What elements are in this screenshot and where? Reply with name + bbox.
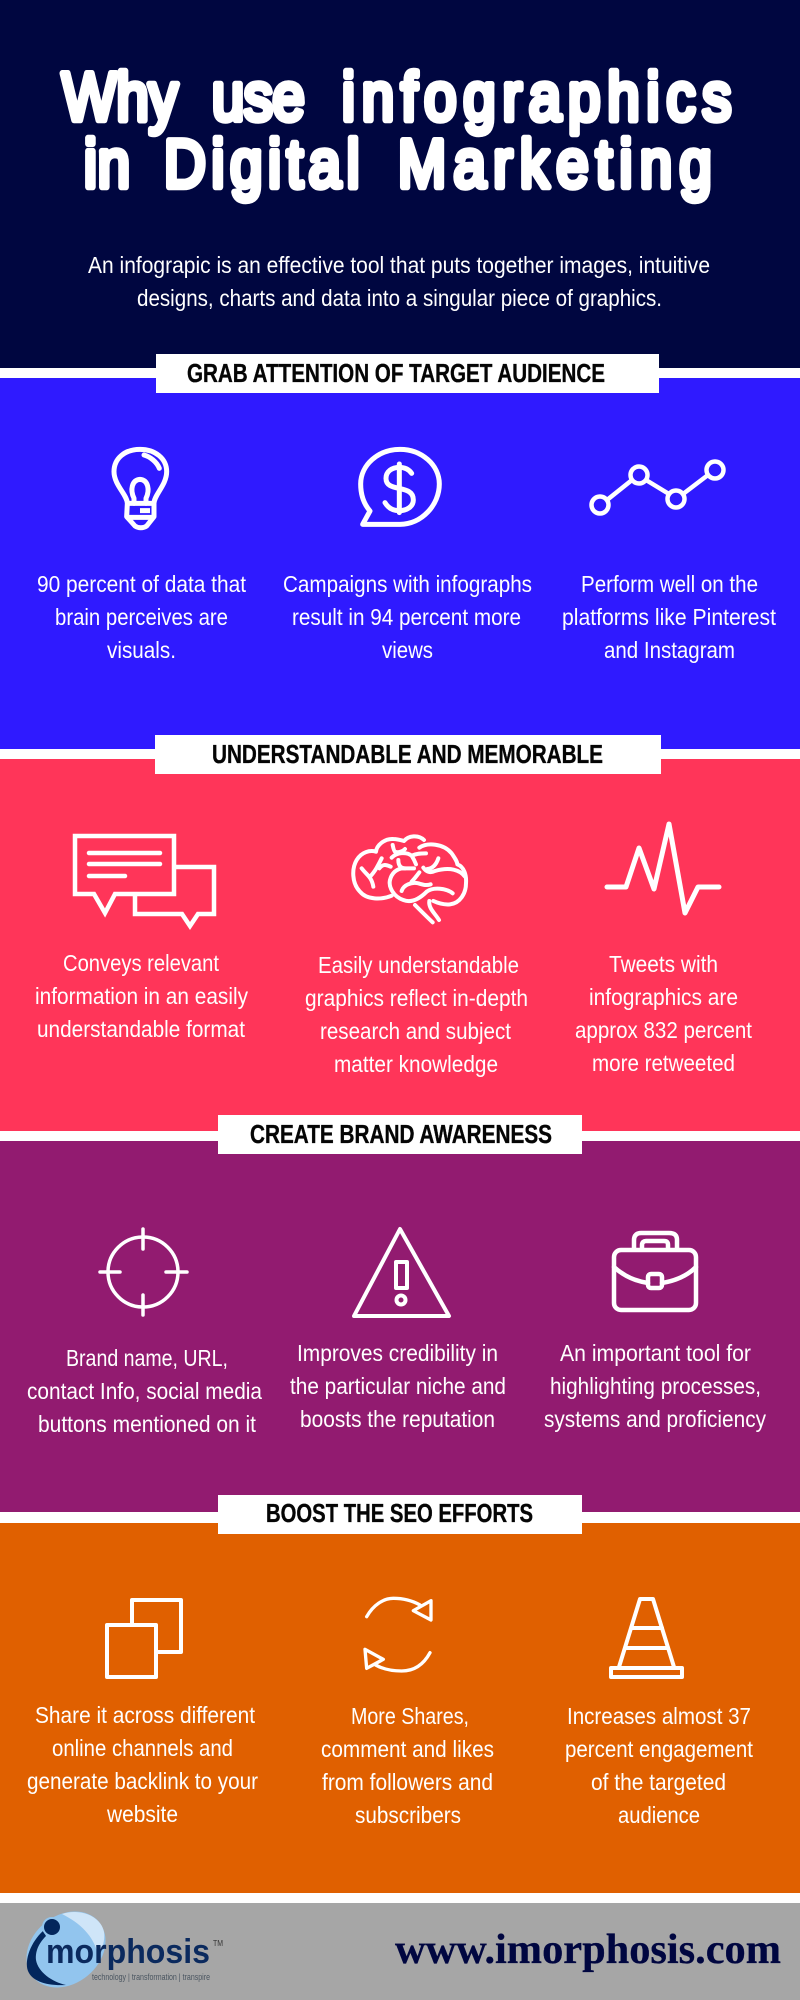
text: memorable column 1: understandable format — [37, 1016, 246, 1042]
heading: understandable — [155, 735, 661, 774]
text: seo column 1: generate backlink to your — [27, 1768, 258, 1794]
text: seo column 3: Increases almost 37 — [567, 1703, 751, 1729]
panel: header background — [0, 0, 800, 368]
title: Digital — [164, 127, 360, 202]
text: seo column 1: online channels and — [52, 1735, 233, 1761]
icon: dollar speech bubble — [361, 449, 439, 524]
text: attention column 1: visuals. — [107, 637, 176, 663]
text: memorable column 3: approx 832 percent — [575, 1017, 753, 1043]
text: brand column 2 — [290, 1340, 506, 1432]
text: brand column 1 — [27, 1345, 262, 1437]
heading: brand awareness — [218, 1115, 582, 1154]
text: seo column 2: subscribers — [355, 1802, 461, 1828]
text: seo column 3: percent engagement — [565, 1736, 754, 1762]
icon: target crosshair — [100, 1229, 187, 1315]
text: attention column 1: brain perceives are — [55, 604, 228, 630]
title: Why — [62, 60, 178, 135]
icon: traffic cone — [611, 1599, 682, 1677]
text: seo column 2: comment and likes — [321, 1736, 494, 1762]
text: seo column 1: Share it across different — [35, 1702, 256, 1728]
text: brand column 2: boosts the reputation — [300, 1406, 495, 1432]
heading: understandable: UNDERSTANDABLE AND MEMORABLE — [212, 741, 603, 769]
text: attention column 2 — [283, 571, 532, 663]
panel: footer background — [0, 1903, 800, 2000]
title: Marketing — [398, 127, 712, 202]
text: brand column 2: the particular niche and — [290, 1373, 506, 1399]
icon: pulse line — [607, 824, 719, 913]
title — [62, 60, 731, 202]
icon: warning triangle — [354, 1229, 449, 1316]
title: infographics — [342, 60, 731, 135]
panel: memorable background — [0, 759, 800, 1131]
text: attention column 2: views — [382, 637, 433, 663]
text: seo column 2: from followers and — [322, 1769, 493, 1795]
panel: attention background — [0, 378, 800, 749]
text: seo column 3: of the targeted — [591, 1769, 726, 1795]
text: memorable column 1: Conveys relevant — [63, 950, 220, 976]
intro text: designs, charts and data into a singular piece of graphics. — [137, 285, 662, 311]
text: attention column 3: and Instagram — [604, 637, 735, 663]
title: in — [84, 127, 130, 202]
text: attention column 3: Perform well on the — [581, 571, 758, 597]
icon: overlapping pages — [107, 1600, 181, 1677]
text: brand column 3: An important tool for — [560, 1340, 751, 1366]
icon: chat bubbles — [75, 836, 214, 926]
text: memorable column 2: research and subject — [320, 1018, 512, 1044]
text: memorable column 1: information in an easily — [35, 983, 248, 1009]
logo: imorphosis: TM — [213, 1939, 223, 1948]
text: brand column 3: highlighting processes, — [550, 1373, 761, 1399]
text: seo column 2: More Shares, — [351, 1703, 469, 1729]
logo: imorphosis: technology | transformation | transpire — [92, 1972, 210, 1982]
text: attention column 2: result in 94 percent more — [292, 604, 521, 630]
text: memorable column 2: graphics reflect in-depth — [305, 985, 528, 1011]
text: attention column 3: platforms like Pinterest — [562, 604, 777, 630]
panel: brand background — [0, 1141, 800, 1512]
icon: line chart — [592, 462, 724, 514]
website url: www.imorphosis.com — [395, 1927, 781, 1973]
intro text: An infograpic is an effective tool that puts together images, intuitive — [88, 252, 710, 278]
title: use — [212, 60, 305, 135]
panel: seo background — [0, 1523, 800, 1893]
text: brand column 3: systems and proficiency — [544, 1406, 766, 1432]
text: attention column 1: 90 percent of data that — [37, 571, 247, 597]
heading: grab attention — [156, 354, 659, 393]
text: memorable column 2: Easily understandable — [318, 952, 519, 978]
text: brand column 1: buttons mentioned on it — [38, 1411, 257, 1437]
intro text — [88, 252, 710, 311]
heading: boost seo — [218, 1495, 582, 1534]
text: attention column 3 — [562, 571, 777, 663]
icon: light bulb — [114, 449, 167, 528]
text: attention column 1 — [37, 571, 247, 663]
text: seo column 3 — [565, 1703, 754, 1828]
text: seo column 2 — [321, 1703, 494, 1828]
icon: brain — [353, 836, 466, 922]
text: memorable column 3: Tweets with — [609, 951, 718, 977]
text: seo column 1 — [27, 1702, 258, 1827]
logo: imorphosis: morphosis — [46, 1933, 210, 1971]
text: memorable column 3: infographics are — [589, 984, 738, 1010]
text: brand column 3 — [544, 1340, 766, 1432]
logo: imorphosis — [11, 1896, 223, 2000]
heading: boost seo: BOOST THE SEO EFFORTS — [266, 1500, 533, 1528]
text: memorable column 2: matter knowledge — [334, 1051, 498, 1077]
text: memorable column 3 — [575, 951, 753, 1076]
heading: brand awareness: CREATE BRAND AWARENESS — [250, 1121, 552, 1149]
text: attention column 2: Campaigns with infographs — [283, 571, 532, 597]
text: memorable column 2 — [305, 952, 528, 1077]
text: brand column 2: Improves credibility in — [297, 1340, 498, 1366]
text: brand column 1: contact Info, social media — [27, 1378, 262, 1404]
icon: briefcase — [614, 1233, 696, 1310]
text: seo column 1: website — [106, 1801, 178, 1827]
text: memorable column 1 — [35, 950, 248, 1042]
text: memorable column 3: more retweeted — [592, 1050, 735, 1076]
text: brand column 1: Brand name, URL, — [66, 1345, 228, 1371]
icon: refresh arrows — [365, 1598, 431, 1671]
text: seo column 3: audience — [618, 1802, 700, 1828]
heading: grab attention: GRAB ATTENTION OF TARGET AUDIENCE — [187, 360, 605, 388]
